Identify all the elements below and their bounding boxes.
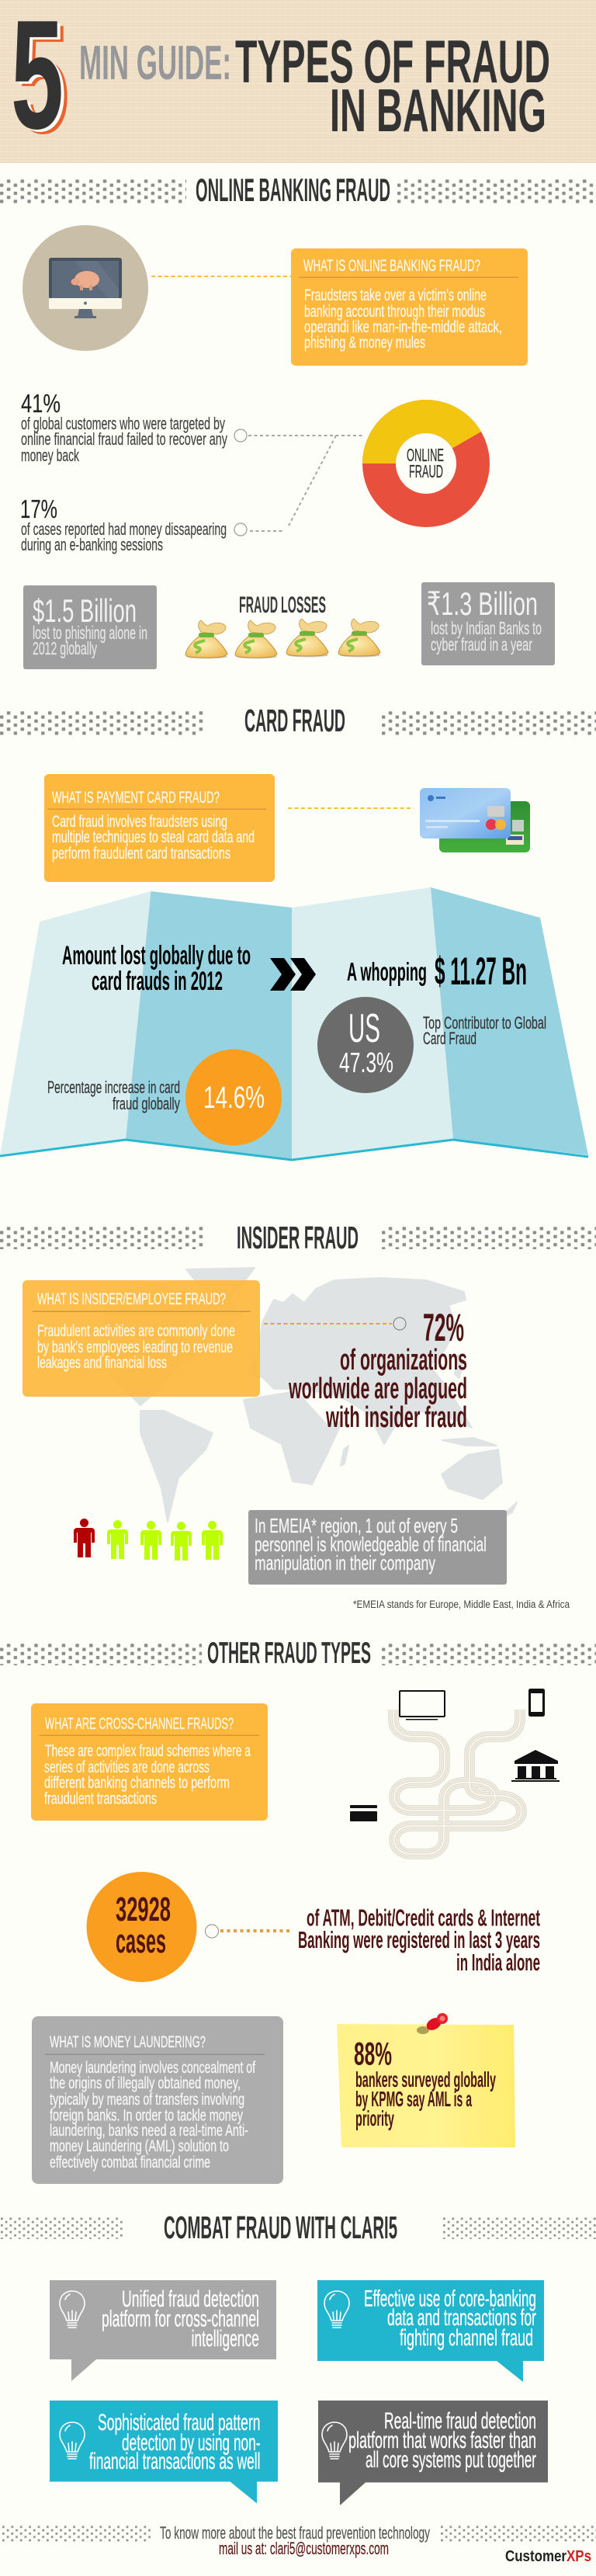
stat: 17 percent: of cases reported had money dissapearing	[21, 519, 227, 539]
icon: light bulb	[60, 2422, 85, 2459]
icon: light bulb	[60, 2291, 85, 2328]
panel heading: WHAT IS INSIDER/EMPLOYEE FRAUD?	[37, 1290, 226, 1308]
text: amount lost	[62, 941, 251, 996]
map panel: card fraud statistics	[0, 887, 588, 1160]
bubble text	[348, 2408, 536, 2473]
diagram: cross-channel tracks	[393, 1710, 522, 1854]
donut label	[407, 445, 444, 481]
caption: percentage increase	[47, 1078, 180, 1113]
speech bubble: real-time detection	[318, 2401, 548, 2505]
panel body	[304, 286, 502, 352]
panel body: operandi like man-in-the-middle attack,	[304, 318, 502, 336]
callout: EMEIA region: In EMEIA* region, 1 out of every 5	[255, 1514, 458, 1537]
donut label: FRAUD	[409, 461, 443, 481]
stat circle: US: 47.3%	[339, 1047, 393, 1078]
panel heading: WHAT ARE CROSS-CHANNEL FRAUDS?	[45, 1715, 234, 1733]
stat: 41 percent	[21, 389, 227, 465]
icon: push pin	[417, 2013, 448, 2034]
stat circle: 32928 cases	[87, 1872, 197, 1982]
footnote: EMEIA definition: *EMEIA stands for Europe, Middle East, India & Africa	[353, 1599, 570, 1610]
stat card: 1.3 billion: cyber fraud in a year	[431, 634, 532, 654]
text: cases description	[298, 1904, 540, 1976]
stat: 41 percent: online financial fraud failed to recover any	[21, 429, 227, 449]
panel: what is money laundering	[32, 2016, 283, 2184]
bubble text: platform for cross-channel	[102, 2306, 259, 2332]
icons: money bags	[185, 619, 380, 658]
sticky note: 88 percent	[337, 2013, 515, 2147]
note text: priority	[355, 2106, 394, 2130]
section heading: insider fraud: INSIDER FRAUD	[237, 1220, 359, 1255]
bubble text: Sophisticated fraud pattern	[98, 2410, 261, 2435]
panel body: Fraudulent activities are commonly done	[37, 1322, 235, 1340]
text: whopping amount: A whopping	[347, 957, 427, 986]
stat circle: percentage increase: 14.6%	[203, 1081, 265, 1115]
panel body	[50, 2059, 255, 2172]
world map background	[102, 1268, 517, 1524]
panel body: Money laundering involves concealment of	[50, 2059, 255, 2077]
footer: contact call to action: To know more about the best fraud prevention technology	[160, 2523, 430, 2543]
section heading: card fraud	[0, 703, 596, 738]
panel body	[37, 1322, 235, 1372]
stat card: 1.5 billion: $1.5 Billion	[33, 592, 137, 629]
panel body: by bank's employees leading to revenue	[37, 1338, 233, 1356]
icon: piggy bank on monitor	[23, 225, 148, 351]
panel body: leakages and financial loss	[37, 1354, 167, 1372]
main title	[235, 27, 550, 144]
icon: payment cards	[420, 788, 530, 852]
text: amount lost: Amount lost globally due to	[62, 941, 251, 970]
panel: what is insider fraud	[23, 1280, 260, 1397]
logo: CustomerXPs: CustomerXPs	[505, 2548, 591, 2565]
infographic canvas: FRAUD LOSSES	[239, 592, 326, 618]
stat: 72 percent of organizations: of organizations	[340, 1344, 467, 1377]
connector: panel to 72 percent	[264, 1318, 406, 1330]
panel heading: WHAT IS ONLINE BANKING FRAUD?	[303, 257, 480, 275]
bubble text	[89, 2410, 261, 2474]
icon: bank building	[511, 1750, 560, 1782]
panel heading: WHAT IS PAYMENT CARD FRAUD?	[52, 789, 220, 807]
connector: cases to description	[205, 1925, 293, 1938]
caption: percentage increase: Percentage increase in card	[47, 1078, 180, 1097]
stat: 72 percent of organizations: with insider fraud	[325, 1401, 467, 1434]
callout: EMEIA region: manipulation in their company	[255, 1551, 435, 1574]
stat circle: US	[317, 997, 414, 1093]
stat card: 1.5 billion	[23, 585, 157, 669]
caption: percentage increase: fraud globally	[113, 1094, 180, 1113]
panel body: These are complex fraud schemes where a	[45, 1742, 251, 1760]
stat: 17 percent	[20, 495, 227, 554]
kicker: min guide: MIN GUIDE:	[79, 36, 231, 90]
panel body: Fraudsters take over a victim's online	[304, 286, 487, 304]
speech bubble: unified detection	[50, 2280, 276, 2381]
panel body: different banking channels to perform	[44, 1774, 230, 1792]
stat: 72 percent of organizations	[288, 1306, 467, 1434]
panel body: laundering, banks need a real-time Anti-	[50, 2122, 248, 2140]
panel body	[44, 1742, 251, 1807]
panel body: fraudulent transactions	[44, 1790, 157, 1807]
bubble text: Unified fraud detection	[122, 2286, 259, 2312]
bubble text	[364, 2286, 536, 2351]
panel heading: WHAT IS MONEY LAUNDERING?	[50, 2033, 206, 2051]
numeral 5	[11, 0, 70, 166]
panel body: Card fraud involves fraudsters using	[52, 813, 227, 831]
text: amount lost: card frauds in 2012	[92, 967, 223, 996]
stat card: 1.3 billion	[421, 582, 555, 665]
donut chart: online fraud	[362, 400, 490, 527]
icon: mobile phone	[528, 1689, 545, 1717]
bubble text: intelligence	[191, 2326, 259, 2352]
section heading: other fraud types: OTHER FRAUD TYPES	[207, 1637, 371, 1670]
panel body: typically by means of transfers involving	[50, 2091, 244, 2109]
bubble text: financial transactions as well	[89, 2449, 261, 2474]
header banner	[0, 0, 596, 166]
stat: 41 percent: of global customers who were targeted by	[21, 414, 225, 433]
stat circle: 32928 cases: cases	[116, 1922, 166, 1960]
connector: dashed line to cards	[288, 807, 414, 809]
panel body: the origins of illegally obtained money,	[50, 2074, 241, 2092]
bubble text	[102, 2286, 259, 2352]
footer: contact call to action	[2, 2523, 596, 2558]
note text: 88%	[354, 2036, 392, 2071]
stat: 41 percent: money back	[21, 446, 80, 465]
stat circle: 32928 cases: 32928	[116, 1890, 171, 1929]
stat card: 1.5 billion: 2012 globally	[33, 638, 97, 658]
icon: card	[350, 1805, 377, 1821]
icon: light bulb	[322, 2422, 347, 2459]
panel: what is payment card fraud	[44, 774, 275, 882]
arrow: double chevron	[270, 958, 316, 991]
panel: what is online banking fraud	[291, 248, 528, 366]
section heading: insider fraud	[0, 1220, 596, 1255]
panel: what are cross-channel frauds	[31, 1703, 268, 1821]
speech bubble: sophisticated detection	[50, 2401, 278, 2503]
note text	[354, 2036, 496, 2130]
panel body: series of activities are done across	[44, 1758, 210, 1776]
icons: five people, one in red	[74, 1519, 223, 1561]
text: whopping amount	[347, 950, 527, 993]
callout: EMEIA region: personnel is knowledgeable of financial	[255, 1533, 487, 1556]
stat: 72 percent of organizations: 72%	[423, 1306, 464, 1349]
icon: light bulb	[324, 2291, 349, 2328]
section heading: online banking fraud	[0, 172, 596, 208]
stat: 17 percent: during an e-banking sessions	[21, 535, 163, 554]
connector: dashed line to definition	[151, 276, 291, 277]
callout: EMEIA region	[248, 1510, 507, 1585]
panel body: effectively combat financial crime	[50, 2154, 210, 2172]
footer: contact call to action: mail us at: clari5@customerxps.com	[219, 2539, 389, 2558]
panel body: multiple techniques to steal card data and	[52, 828, 255, 846]
stat card: 1.3 billion: ₹1.3 Billion	[427, 585, 538, 622]
caption: top contributor	[423, 1013, 546, 1048]
panel body: foreign banks. In order to tackle money	[50, 2107, 243, 2124]
speech bubble: core-banking data	[317, 2280, 544, 2382]
caption: top contributor: Card Fraud	[423, 1029, 476, 1048]
section heading: other fraud types	[0, 1637, 596, 1670]
stat card: 1.5 billion: lost to phishing alone in	[33, 623, 147, 643]
section heading: card fraud: CARD FRAUD	[244, 703, 345, 738]
panel body: money Laundering (AML) solution to	[50, 2137, 229, 2155]
section heading: online banking fraud: ONLINE BANKING FRAUD	[196, 172, 390, 208]
stat circle: US: US	[348, 1006, 380, 1051]
panel body	[52, 813, 255, 863]
bubble text: detection by using non-	[122, 2430, 261, 2456]
stat: 17 percent: 17%	[20, 495, 57, 523]
note text: by KPMG say AML is a	[355, 2087, 472, 2111]
donut label: ONLINE	[407, 445, 444, 465]
panel body: banking account through their modus	[304, 303, 485, 321]
stat circle: percentage increase	[185, 1050, 282, 1146]
icon: monitor	[400, 1691, 445, 1720]
panel body: perform fraudulent card transactions	[52, 845, 230, 863]
stat: 41 percent: 41%	[21, 389, 61, 418]
connectors: stats to donut	[234, 429, 365, 536]
panel body: phishing & money mules	[304, 334, 425, 352]
